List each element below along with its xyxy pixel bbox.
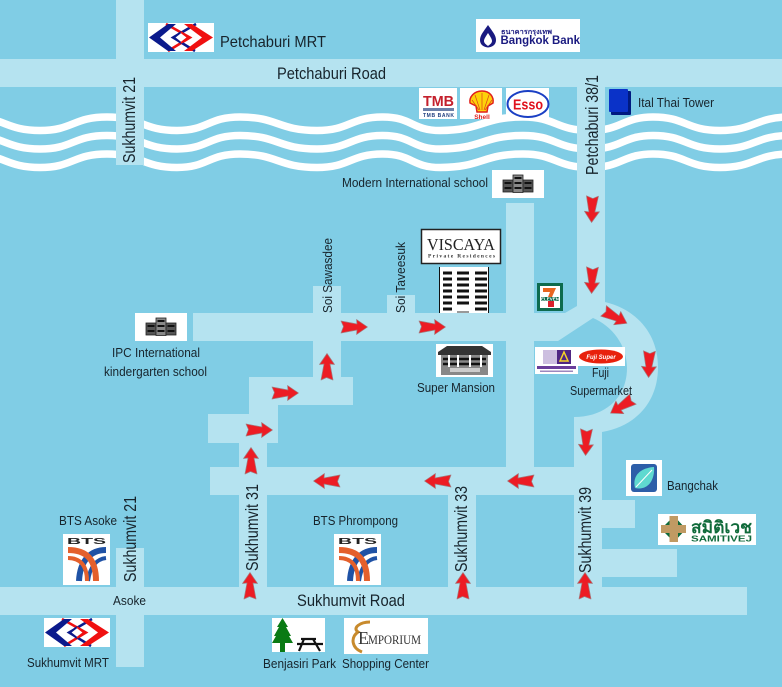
road: Sukhumvit 21 north [116, 0, 144, 165]
road: Sukhumvit 31 [239, 440, 267, 590]
label: Sukhumvit 39: Sukhumvit 39 [575, 487, 595, 573]
label: Bangchak: Bangchak [667, 479, 719, 493]
label: BTS Asoke: BTS Asoke [59, 514, 117, 528]
label: Benjasiri Park: Benjasiri Park [263, 657, 337, 671]
arrow [584, 267, 600, 294]
road: Soi Sawasdee [313, 286, 341, 391]
arrow [272, 386, 298, 400]
label: Ital Thai Tower: Ital Thai Tower [638, 95, 715, 110]
arrow [244, 448, 258, 474]
road: Petchaburi Road [0, 59, 782, 87]
logo: Esso: Esso [513, 96, 543, 114]
logo: Bangkok Bank: Bangkok Bank [500, 35, 581, 47]
logo: Viscaya [422, 230, 500, 264]
label: IPC International kindergarten school: kindergarten school [104, 365, 207, 379]
arrow [341, 320, 368, 334]
label: Sukhumvit MRT: Sukhumvit MRT [27, 656, 109, 670]
label: Sukhumvit 21 south: Sukhumvit 21 [120, 496, 140, 582]
label: Petchaburi 38/1: Petchaburi 38/1 [582, 75, 602, 175]
icon: Super Mansion [436, 344, 493, 377]
label: Fuji Supermarket: Supermarket [570, 384, 632, 398]
logo: Bangkok Bank [476, 19, 581, 52]
icon: Petchaburi MRT [148, 23, 214, 52]
logo: 7-Eleven [537, 283, 563, 311]
logo: Samitivej: สมิติเวช [691, 518, 752, 537]
logo: Fuji Super: Fuji Super [586, 355, 616, 361]
logo: Bangchak [626, 460, 662, 496]
logo: Fuji Super [578, 347, 625, 366]
label: Sukhumvit 31: Sukhumvit 31 [242, 484, 262, 571]
road: step upper [249, 377, 353, 405]
logo: Esso [506, 88, 549, 118]
label: IPC International kindergarten school [104, 346, 207, 379]
arrow [424, 474, 451, 488]
label: Fuji Supermarket [570, 366, 632, 398]
road: Sukhumvit 21 south [116, 548, 144, 667]
logo: Emporium: E [358, 628, 369, 648]
arrow [242, 572, 258, 599]
logo: TMB Bank: TMB BANK [423, 113, 454, 119]
road: Sukhumvit 33 [448, 490, 476, 590]
label: Petchaburi MRT: Petchaburi MRT [220, 34, 326, 51]
label: Asoke: Asoke [113, 594, 146, 608]
label: Sukhumvit 21 north: Sukhumvit 21 [119, 77, 139, 163]
logo: 7-Eleven: ELEVEN [541, 296, 559, 302]
road: Soi Taveesuk [387, 295, 415, 315]
arrow [246, 422, 272, 438]
road: Sukhumvit Road [0, 587, 747, 615]
label: BTS Phrompong: BTS Phrompong [313, 514, 398, 528]
arrow [600, 304, 630, 330]
label: Soi Sawasdee: Soi Sawasdee [321, 238, 335, 313]
arrow [508, 474, 534, 488]
arrow [607, 393, 637, 420]
road: Soi main [193, 313, 543, 341]
road: link to ring [530, 300, 600, 341]
label: IPC International kindergarten school: IPC International [112, 346, 200, 360]
arrow [641, 351, 657, 378]
label: Petchaburi Road: Petchaburi Road [277, 65, 386, 83]
label: Sukhumvit Road: Sukhumvit Road [297, 592, 405, 610]
logo: Shell [460, 88, 502, 121]
decorative waves [0, 117, 782, 168]
label: Sukhumvit 33: Sukhumvit 33 [451, 486, 471, 572]
logo: Bangkok Bank: ธนาคารกรุงเทพ [501, 29, 552, 36]
icon: Ital Thai Tower [609, 89, 631, 115]
label: Shopping Center: Shopping Center [342, 657, 429, 671]
logo: BTS Asoke [63, 534, 110, 585]
icon: Benjasiri Park [272, 618, 325, 652]
arrow [456, 572, 470, 599]
logo: TMB Bank [419, 88, 457, 119]
road: Samitivej stub [600, 549, 677, 577]
logo: Shell: Shell [474, 114, 490, 121]
logo: Viscaya: Private Residences [428, 254, 495, 260]
road: ring [574, 302, 658, 432]
arrow [419, 320, 446, 334]
logo: Samitivej: SAMITIVEJ [691, 534, 752, 544]
arrow [320, 354, 334, 380]
icon: Sukhumvit MRT [44, 618, 110, 647]
road: Bangchak stub [600, 500, 635, 528]
arrow [584, 196, 600, 223]
label: Soi Taveesuk: Soi Taveesuk [394, 241, 408, 313]
arrow [314, 474, 340, 488]
road: Sukhumvit 39 [574, 418, 602, 590]
logo: SCB [535, 347, 578, 374]
road: step lower [208, 414, 278, 443]
road: Modern school soi [506, 203, 534, 483]
road labels [119, 65, 602, 610]
road: Petchaburi 38/1 [577, 87, 605, 312]
logo: Emporium: MPORIUM [368, 632, 421, 647]
arrow [578, 572, 592, 599]
label: Modern International school: Modern International school [342, 176, 488, 190]
icon: Viscaya tower [439, 267, 489, 313]
arrow [578, 429, 594, 456]
icon: Modern International school building [492, 170, 544, 198]
label: Fuji Supermarket: Fuji [592, 366, 609, 380]
label: Super Mansion: Super Mansion [417, 381, 495, 395]
logo: Emporium [344, 618, 428, 654]
logo: Viscaya: VISCAYA [427, 235, 495, 254]
logo: BTS Phrompong [334, 534, 381, 585]
icon: IPC school building [135, 313, 187, 341]
direction arrows [242, 196, 657, 599]
logo: TMB Bank: TMB [423, 93, 454, 110]
logo: Samitivej [658, 514, 756, 545]
road: cross soi [210, 467, 602, 495]
